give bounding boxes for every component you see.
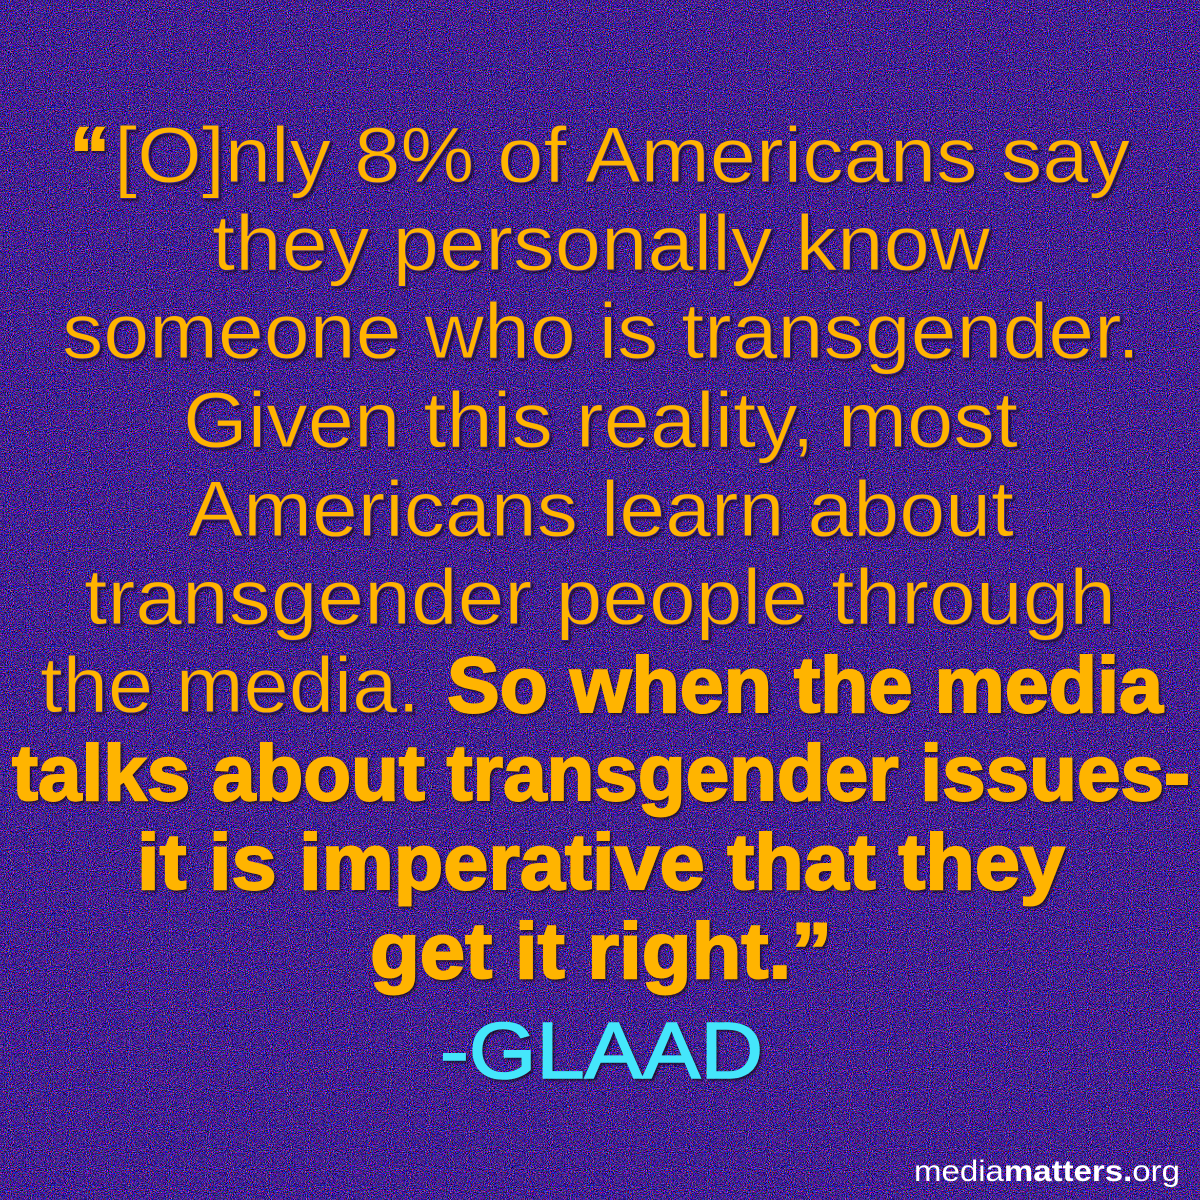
attribution: GLAAD: -GLAAD <box>440 1006 763 1095</box>
quote line 7 regular: the media. <box>40 640 420 729</box>
quote line 5: Americans learn about <box>188 464 1014 553</box>
quote line 3: someone who is transgender. <box>62 286 1140 375</box>
quote line 9 bold: it is imperative that they <box>137 817 1065 906</box>
quote line 4: Given this reality, most <box>183 375 1018 464</box>
quote line 10 bold: get it right.” <box>370 906 832 995</box>
logo: mediamatters.org: media matters. org <box>914 1155 1180 1188</box>
quote line 1: “ <box>70 110 110 199</box>
quote line 1: [O]nly 8% of Americans say <box>114 110 1131 199</box>
quote line 2: they personally know <box>212 198 991 287</box>
quote line 8 bold: talks about transgender issues- <box>12 728 1190 817</box>
quote line 7 bold: So when the media <box>447 640 1164 729</box>
quote text block <box>12 110 1190 995</box>
quote line 6: transgender people through <box>84 552 1116 641</box>
